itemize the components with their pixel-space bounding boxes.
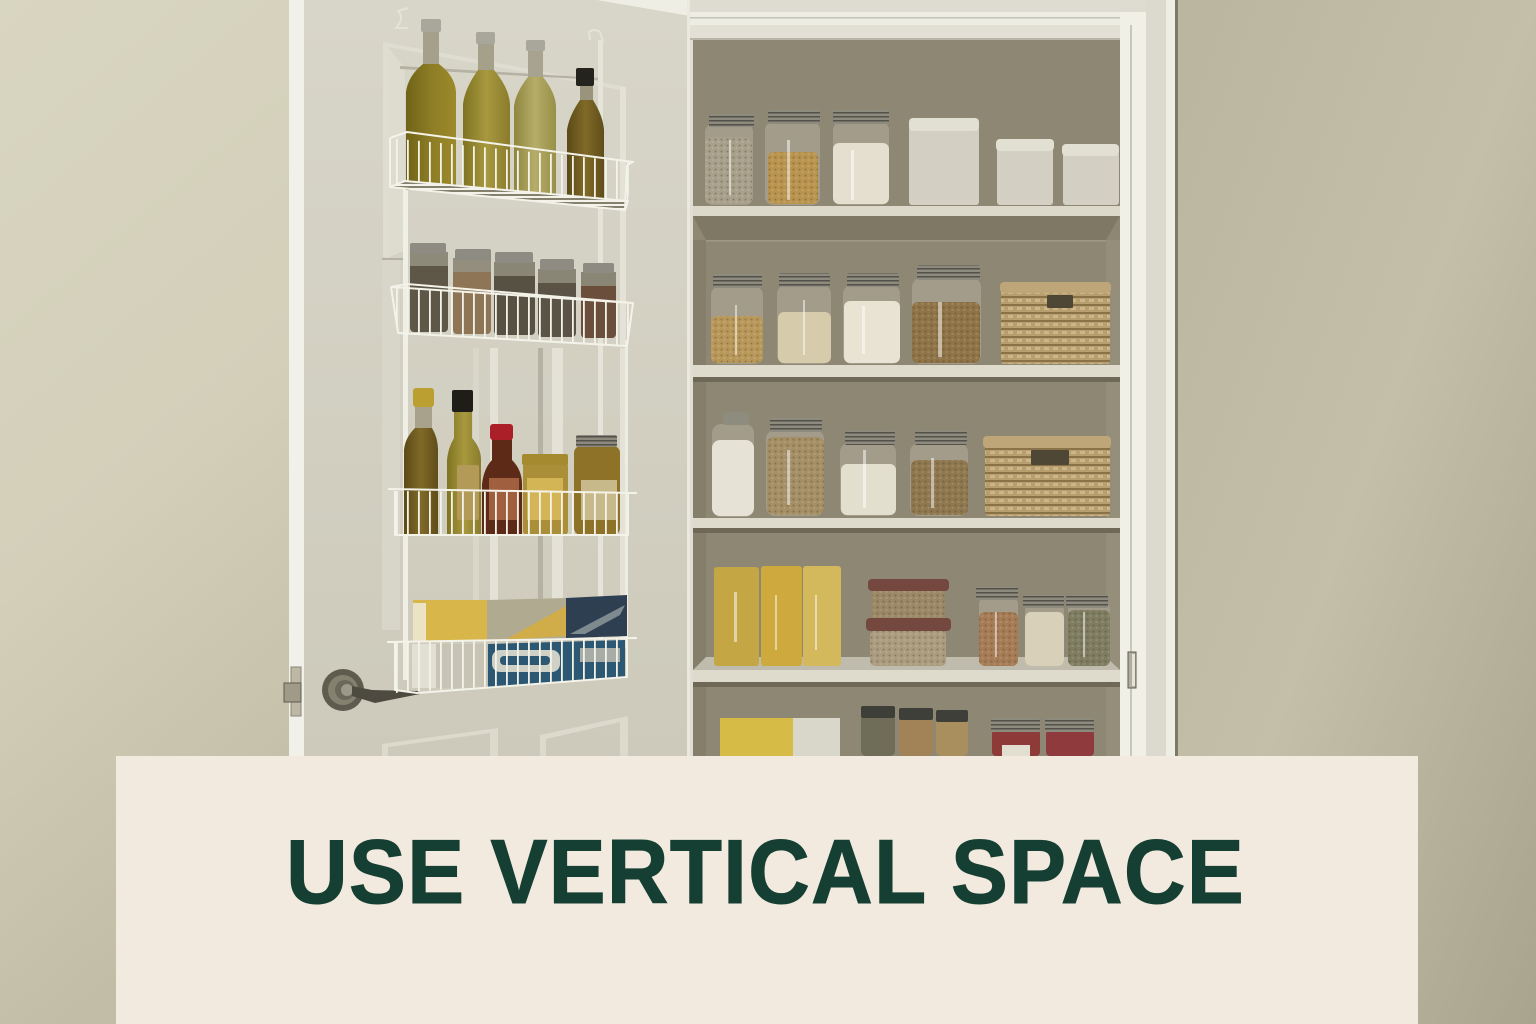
title: USE VERTICAL SPACE bbox=[286, 821, 1244, 923]
jar bbox=[1045, 718, 1094, 756]
canister bbox=[1062, 144, 1119, 205]
pantry frame and interior bbox=[685, 0, 1178, 756]
shelf 1 jars and canisters bbox=[705, 110, 1119, 205]
shelf 3 jars and basket bbox=[712, 412, 1111, 517]
door hinge bbox=[284, 667, 301, 716]
mustard jar bbox=[522, 454, 568, 535]
shelf 4 packs, containers and jars bbox=[714, 566, 1110, 666]
door rack frame bbox=[396, 8, 628, 680]
jar bbox=[705, 114, 754, 205]
bottle bbox=[406, 19, 456, 190]
jar bbox=[899, 708, 933, 756]
wall: right bbox=[1170, 0, 1536, 1024]
rack tier 1: oil bottles bbox=[406, 19, 604, 198]
yellow pack bbox=[803, 566, 841, 666]
rack basket 4 bbox=[387, 638, 637, 693]
jar bbox=[1023, 595, 1064, 666]
jar bbox=[777, 273, 831, 364]
door bbox=[284, 0, 690, 756]
rack basket 2 bbox=[391, 284, 633, 346]
bottle bbox=[404, 388, 438, 535]
lower box bbox=[412, 640, 625, 688]
honey jar bbox=[574, 435, 620, 535]
jar bbox=[840, 431, 896, 516]
milk bottle bbox=[712, 412, 754, 517]
spice jar bbox=[410, 243, 448, 332]
wicker basket bbox=[1000, 282, 1111, 364]
jar bbox=[861, 706, 895, 756]
door handle bbox=[322, 669, 420, 711]
jar bbox=[912, 265, 981, 364]
rack tier 2: spice jars bbox=[410, 243, 616, 338]
jar bbox=[910, 431, 968, 516]
yellow pack bbox=[761, 566, 802, 666]
rack tier 4: boxes bbox=[412, 595, 627, 688]
spice jar bbox=[494, 252, 535, 335]
jar bbox=[1066, 595, 1110, 666]
spice jar bbox=[538, 259, 576, 337]
bottle bbox=[514, 40, 556, 194]
jar bbox=[766, 418, 824, 516]
bottle bbox=[447, 390, 481, 535]
hinge: frame bbox=[1128, 652, 1136, 688]
box bbox=[720, 718, 840, 756]
wicker basket bbox=[983, 436, 1111, 516]
foil box bbox=[413, 595, 627, 641]
food container bbox=[868, 579, 949, 622]
canister bbox=[909, 118, 979, 205]
jar bbox=[711, 274, 763, 364]
jar bbox=[833, 110, 889, 205]
shelf 2 jars and basket bbox=[711, 265, 1111, 364]
rack basket 3 bbox=[388, 489, 637, 535]
spice jar bbox=[453, 249, 491, 334]
shelves bbox=[693, 206, 1120, 687]
spice jar bbox=[581, 263, 616, 338]
bottle bbox=[463, 32, 510, 192]
rack tier 3: bottles and jars bbox=[404, 388, 620, 535]
shelf 5 box and jars bbox=[720, 706, 1094, 756]
wall: left bbox=[0, 0, 300, 1024]
canister bbox=[996, 139, 1054, 205]
door panel mouldings bbox=[382, 42, 628, 756]
jar bbox=[843, 273, 900, 364]
jar bbox=[976, 587, 1018, 666]
dark bottle bbox=[567, 68, 604, 198]
rack basket 1 bbox=[390, 132, 633, 210]
red sauce bottle bbox=[482, 424, 522, 535]
food container bbox=[866, 618, 951, 666]
yellow pack bbox=[714, 567, 759, 666]
jar bbox=[936, 710, 968, 756]
jar bbox=[765, 110, 820, 205]
title panel bbox=[116, 756, 1418, 1024]
jar bbox=[991, 718, 1040, 756]
